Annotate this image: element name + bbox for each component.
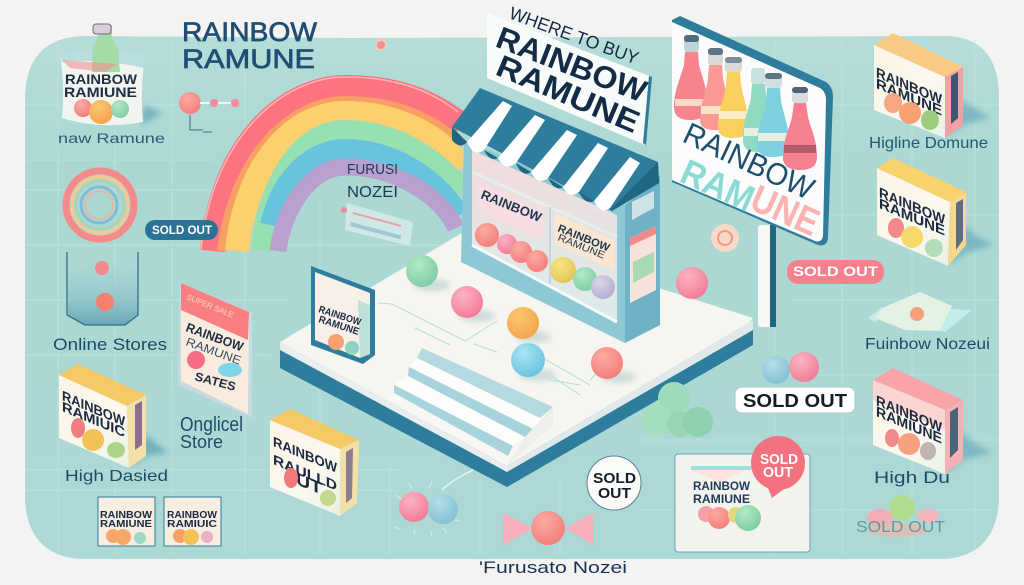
furusato nozei label: NOZEI <box>347 184 398 201</box>
caption: onglicel store: Store <box>180 432 223 452</box>
billboard: RAM <box>675 151 761 219</box>
billboard <box>672 16 833 327</box>
candy store: RAINBOW <box>479 187 545 225</box>
phone display on platform: RAMUNE <box>317 314 361 338</box>
steps <box>385 348 553 466</box>
furusato ticket <box>341 203 413 246</box>
caption: furusato nozei: 'Furusato Nozei <box>479 558 627 577</box>
product box: left: RAMIUIC <box>62 399 125 441</box>
product bag with bottle: RAMIUNE <box>64 84 137 100</box>
flyer: RAMUNE <box>184 335 243 368</box>
flyer <box>178 283 252 418</box>
caption: fuinbow nozeui: Fuinbow Nozeui <box>865 336 990 353</box>
product box: top right <box>874 33 990 138</box>
bottle: yellow <box>718 57 748 138</box>
glass cube icon <box>67 252 138 325</box>
platform with steps <box>280 228 753 487</box>
sold out product card: RAMIUNE <box>693 494 750 506</box>
mini product card 1: RAMIUNE <box>100 519 152 530</box>
candy pair with sparkles <box>395 470 473 536</box>
bottle: rose <box>783 87 817 170</box>
furusato nozei label <box>347 161 398 201</box>
caption: naw ramune: naw Ramune <box>58 130 165 146</box>
product box: center bottom: UT <box>296 469 322 499</box>
candy store: RAMUNE <box>556 233 607 262</box>
store sign: where to buy <box>487 3 652 145</box>
candy store <box>452 88 660 343</box>
faded candy with sold out <box>856 495 946 537</box>
sold out pill: teal: SOLD OUT <box>152 225 212 237</box>
flyer: SUPER SALE <box>185 293 235 320</box>
product bag with bottle: RAINBOW <box>65 71 138 87</box>
product box: top right: RAMUNE <box>876 76 942 120</box>
small connector dots <box>179 92 239 132</box>
caption: high dasied: High Dasied <box>65 468 168 485</box>
faded candy with sold out: SOLD OUT <box>856 519 946 536</box>
sold out pill: white <box>735 387 855 413</box>
rainbow ring <box>66 171 134 239</box>
bottle: coral <box>700 48 730 130</box>
product box: center bottom: RAULLD <box>273 452 337 495</box>
billboard text: RAINBOW <box>678 116 820 207</box>
phone display on platform: RAINBOW <box>317 304 363 329</box>
red speech bubble <box>751 436 805 498</box>
product box: top right: RAINBOW <box>876 65 943 109</box>
product box: left: RAINBOW <box>62 388 125 430</box>
product box: right middle <box>877 158 994 266</box>
pole <box>758 225 776 327</box>
mini product card 1 <box>98 497 155 546</box>
mini product card 2 <box>164 497 221 546</box>
store sign: where to buy: WHERE TO BUY <box>507 3 641 68</box>
rainbow arch <box>201 77 462 251</box>
caption: high du: High Du <box>874 468 950 487</box>
bottle: blue <box>757 73 789 157</box>
sold out round sticker: SOLD <box>593 470 636 487</box>
product box: center bottom <box>270 409 359 516</box>
furusato nozei label: FURUSI <box>347 161 398 178</box>
awning <box>452 88 659 210</box>
small peach dot <box>711 224 739 252</box>
flyer: RAINBOW <box>184 320 246 355</box>
mini product card 2: RAINBOW <box>167 510 218 521</box>
candy pair: blue and pink <box>762 352 819 384</box>
sold out round sticker <box>587 456 641 510</box>
product bag with bottle <box>60 24 162 125</box>
product box: bottom right: RAINBOW <box>876 393 943 437</box>
caption: higline domune: Higline Domune <box>869 135 988 152</box>
caption: onglicel store: Onglicel <box>180 414 243 436</box>
sold out pill: pink <box>787 260 884 284</box>
store sign: where to buy: RAMUNE <box>491 48 645 140</box>
wrapped candy <box>503 511 593 545</box>
window balls <box>475 223 615 299</box>
sold out pill: white: SOLD OUT <box>743 391 847 411</box>
title: rainbow ramune <box>182 17 318 74</box>
phone display on platform <box>311 266 375 364</box>
title: rainbow ramune: RAINBOW <box>182 17 318 47</box>
floor lines <box>378 303 607 395</box>
bottle: pink <box>674 35 708 120</box>
sold out product card <box>675 436 810 552</box>
small pin dot <box>376 40 386 50</box>
product box: right middle: RAMUNE <box>879 196 945 240</box>
green candy cluster <box>642 382 713 437</box>
side posters <box>632 191 654 220</box>
product box: left <box>59 364 168 468</box>
flyer: SATES <box>193 369 237 394</box>
product box: center bottom: RAINBOW <box>273 434 337 477</box>
sold out pill: teal <box>145 220 218 240</box>
mini product card 1: RAINBOW <box>100 510 153 521</box>
billboard: UNE <box>744 178 825 245</box>
store sign: where to buy: RAINBOW <box>491 20 652 109</box>
platform candy balls <box>406 255 708 383</box>
candy store: RAINBOW <box>556 223 612 255</box>
sold out round sticker: OUT <box>598 485 631 502</box>
title: rainbow ramune: RAMUNE <box>182 44 315 74</box>
sold out pill: pink: SOLD OUT <box>793 263 879 279</box>
product box: bottom right: RAMIUNE <box>876 404 942 448</box>
window <box>472 150 617 322</box>
red speech bubble: SOLD <box>760 452 798 468</box>
facade <box>461 140 625 343</box>
mini product card 2: RAMIUIC <box>167 519 217 530</box>
red speech bubble: OUT <box>763 465 793 481</box>
caption: onglicel store <box>180 414 243 452</box>
product box: bottom right <box>873 368 992 474</box>
product box: right middle: RAINBOW <box>879 185 946 229</box>
caption: online stores: Online Stores <box>53 336 167 354</box>
candy wrapper <box>868 292 972 332</box>
bottle: mint <box>743 68 773 152</box>
sold out product card: RAINBOW <box>693 481 750 493</box>
